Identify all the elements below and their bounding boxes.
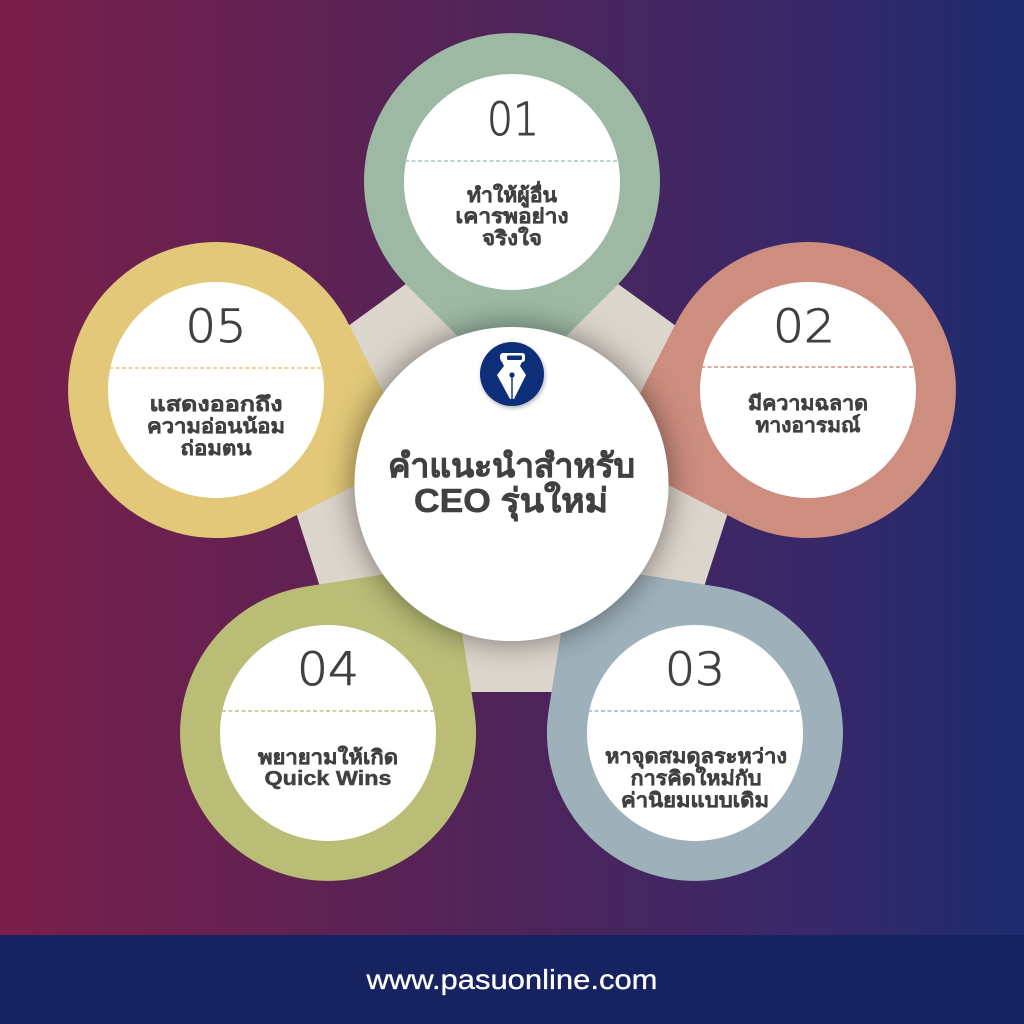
footer bar	[0, 935, 1024, 1024]
title: คำแนะนำสำหรับ	[388, 447, 635, 484]
panel: step 05: แสดงออกถึง	[150, 394, 282, 416]
panel: step 05: 05	[186, 300, 246, 353]
panel: step 01	[404, 74, 620, 290]
panel: step 01: ทำให้ผู้อื่น	[467, 180, 557, 209]
panel: step 05: ถ่อมตน	[180, 438, 252, 460]
panel: step 02: 02	[773, 300, 835, 353]
panel: step 01: เคารพอย่าง	[456, 206, 568, 228]
panel: step 03: หาจุดสมดุลระหว่าง	[605, 746, 787, 769]
panel: step 02: มีความฉลาด	[748, 392, 868, 415]
panel: step 02: ทางอารมณ์	[756, 414, 861, 437]
drop shape 01	[364, 33, 660, 390]
panel: step 04: Quick Wins	[264, 768, 392, 790]
drop shape 04	[121, 477, 571, 940]
title	[388, 447, 635, 522]
title: CEO รุ่นใหม่	[414, 481, 608, 522]
panel: step 04	[220, 625, 436, 841]
panel: step 05	[108, 282, 324, 498]
drop shape 03	[452, 477, 902, 940]
panel: step 01: 01	[487, 93, 539, 146]
panel: step 04: พยายามให้เกิด	[258, 745, 398, 769]
panel: step 05: ความอ่อนน้อม	[147, 415, 285, 438]
drop shape 05	[30, 204, 461, 595]
drop shape 02	[563, 204, 994, 595]
panel: step 01: จริงใจ	[482, 226, 542, 250]
central pentagon	[257, 207, 767, 692]
panel: center circle	[354, 327, 668, 641]
panel: step 04: 04	[297, 643, 359, 696]
footer website url: www.pasuonline.com	[365, 964, 658, 995]
panel: step 03: ค่านิยมแบบเดิม	[621, 790, 769, 812]
panel: step 03	[587, 625, 803, 841]
icon: fountain pen nib logo	[480, 342, 544, 406]
panel: step 03: การคิดใหม่กับ	[630, 766, 762, 790]
panel: step 02	[700, 282, 916, 498]
panel: step 03: 03	[665, 643, 725, 696]
